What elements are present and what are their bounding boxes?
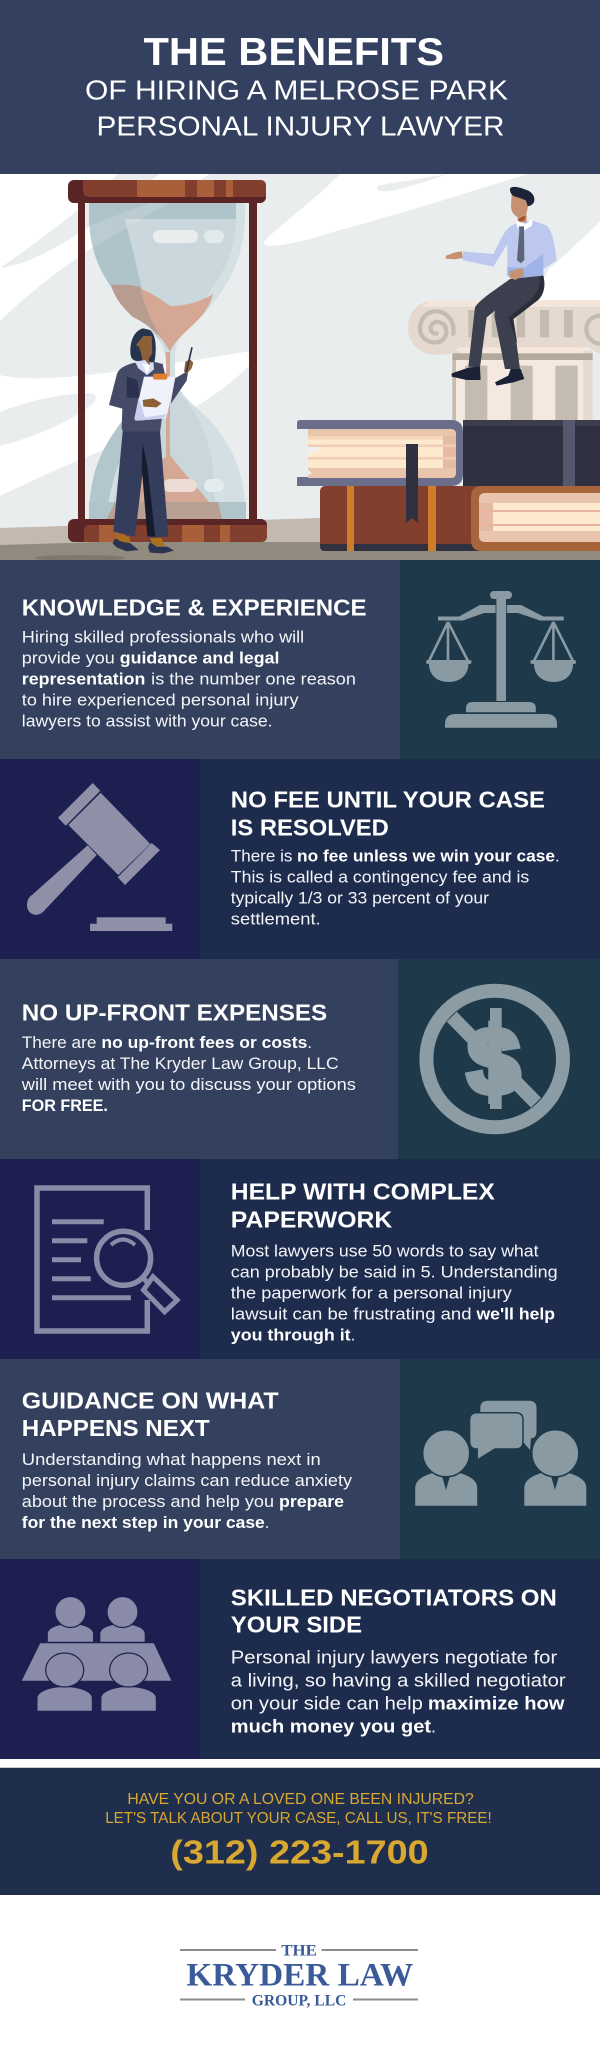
icon: document with magnifier bbox=[37, 1188, 177, 1331]
heading: HAPPENS NEXT bbox=[22, 1415, 210, 1441]
heading: GUIDANCE ON WHAT bbox=[22, 1388, 279, 1414]
text block: about the process and help you bbox=[22, 1492, 274, 1511]
hourglass bbox=[68, 180, 267, 542]
text block: Most lawyers use 50 words to say what bbox=[231, 1242, 539, 1261]
call to action text: LET'S TALK ABOUT YOUR CASE, CALL US, IT'S FREE! bbox=[105, 1810, 492, 1827]
panel: no fee until resolved bbox=[0, 759, 600, 959]
man sitting on column bbox=[445, 187, 557, 386]
text block: FOR FREE. bbox=[22, 1096, 108, 1115]
logo: The Kryder Law Group, LLC: THE bbox=[281, 1943, 317, 1960]
heading: KNOWLEDGE & EXPERIENCE bbox=[22, 594, 367, 620]
heading: SKILLED NEGOTIATORS ON bbox=[231, 1584, 557, 1610]
text block: will meet with you to discuss your options bbox=[21, 1075, 356, 1094]
heading bbox=[231, 1178, 495, 1232]
icon: two people talking bbox=[415, 1401, 586, 1506]
text block: There is bbox=[231, 847, 292, 866]
title bbox=[85, 31, 508, 142]
text block: to hire experienced personal injury bbox=[22, 690, 299, 709]
text block bbox=[22, 1450, 353, 1532]
text block bbox=[231, 1647, 566, 1736]
heading: NO FEE UNTIL YOUR CASE bbox=[231, 786, 545, 812]
icon: scales of justice bbox=[426, 591, 576, 728]
text block: . bbox=[555, 847, 560, 866]
text block: Understanding what happens next in bbox=[22, 1450, 321, 1469]
text block: much money you get bbox=[231, 1716, 431, 1736]
text block: lawyers to assist with your case. bbox=[22, 711, 272, 730]
text block: Personal injury lawyers negotiate for bbox=[231, 1647, 557, 1667]
text block: is the number one reason bbox=[151, 669, 356, 688]
text block: Hiring skilled professionals who will bbox=[22, 627, 304, 646]
call to action text: HAVE YOU OR A LOVED ONE BEEN INJURED? bbox=[127, 1791, 474, 1808]
text block: There are bbox=[22, 1033, 96, 1052]
icon: gavel bbox=[27, 783, 172, 931]
text block bbox=[231, 847, 560, 929]
text block: . bbox=[307, 1033, 312, 1052]
woman with clipboard bbox=[109, 328, 193, 553]
text block bbox=[22, 627, 356, 730]
text block: provide you bbox=[22, 648, 115, 667]
text block: can probably be said in 5. Understanding bbox=[231, 1263, 558, 1282]
text block: . bbox=[351, 1326, 355, 1345]
books bbox=[297, 420, 600, 551]
heading: NO UP-FRONT EXPENSES bbox=[22, 999, 327, 1025]
hero illustration bbox=[0, 174, 600, 561]
title: OF HIRING A MELROSE PARK bbox=[85, 74, 508, 106]
panel: help with paperwork bbox=[0, 1159, 600, 1359]
text block: prepare bbox=[279, 1492, 344, 1511]
text block bbox=[231, 1242, 558, 1345]
text block: . bbox=[431, 1716, 436, 1736]
text block bbox=[21, 1033, 356, 1115]
icon: no dollar sign bbox=[426, 991, 563, 1127]
text block: typically 1/3 or 33 percent of your bbox=[231, 889, 489, 908]
logo: The Kryder Law Group, LLC bbox=[180, 1943, 418, 2009]
heading bbox=[231, 786, 545, 840]
column capital and shaft bbox=[408, 301, 600, 421]
title: PERSONAL INJURY LAWYER bbox=[96, 111, 504, 142]
heading bbox=[231, 1584, 557, 1638]
text block: no fee unless we win your case bbox=[297, 847, 555, 866]
call to action text bbox=[105, 1791, 492, 1827]
header banner bbox=[0, 0, 600, 174]
panel: no up-front expenses bbox=[0, 959, 600, 1159]
text block: guidance and legal bbox=[120, 648, 279, 667]
logo: The Kryder Law Group, LLC: KRYDER LAW bbox=[186, 1958, 413, 1994]
logo: The Kryder Law Group, LLC: GROUP, LLC bbox=[252, 1992, 346, 2009]
icon: negotiation table bbox=[22, 1596, 171, 1711]
text block: settlement. bbox=[231, 910, 321, 929]
text block: personal injury claims can reduce anxiety bbox=[22, 1471, 353, 1490]
call to action band bbox=[0, 1767, 600, 1895]
text block: no up-front fees or costs bbox=[101, 1033, 307, 1052]
text block: you through it bbox=[231, 1326, 351, 1345]
text block: . bbox=[265, 1513, 270, 1532]
phone number: (312) 223-1700 bbox=[170, 1833, 429, 1870]
ground bbox=[0, 518, 600, 561]
panel: guidance on what happens next bbox=[0, 1359, 600, 1559]
title: THE BENEFITS bbox=[144, 31, 444, 74]
heading: IS RESOLVED bbox=[231, 814, 389, 840]
heading: YOUR SIDE bbox=[231, 1612, 362, 1638]
text block: representation bbox=[22, 669, 145, 688]
panel: skilled negotiators bbox=[0, 1559, 600, 1759]
heading bbox=[22, 1388, 279, 1441]
heading: PAPERWORK bbox=[231, 1206, 393, 1232]
text block: the paperwork for a personal injury bbox=[231, 1284, 512, 1303]
text block: Attorneys at The Kryder Law Group, LLC bbox=[22, 1054, 339, 1073]
panel: knowledge and experience bbox=[0, 560, 600, 759]
heading: HELP WITH COMPLEX bbox=[231, 1178, 495, 1204]
icon: no dollar sign: $ bbox=[467, 1009, 520, 1115]
text block: This is called a contingency fee and is bbox=[231, 868, 529, 887]
text block: we'll help bbox=[475, 1305, 555, 1324]
text block: a living, so having a skilled negotiator bbox=[231, 1670, 566, 1690]
text block: on your side can help bbox=[231, 1693, 423, 1713]
text block: for the next step in your case bbox=[22, 1513, 265, 1532]
text block: lawsuit can be frustrating and bbox=[231, 1305, 472, 1324]
text block: maximize how bbox=[428, 1693, 566, 1713]
